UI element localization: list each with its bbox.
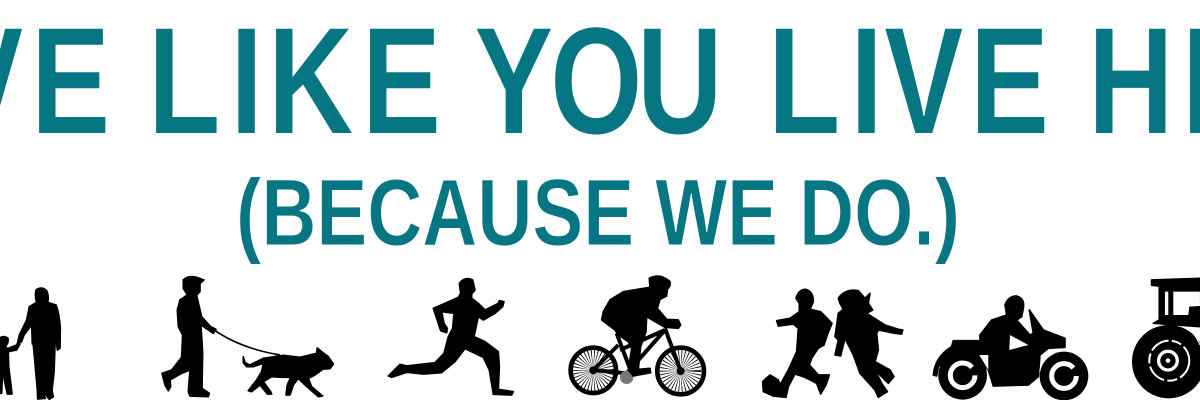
icon: person walking dog xyxy=(162,277,333,397)
icon: children playing football xyxy=(762,289,903,397)
subtitle: (BECAUSE WE DO.) xyxy=(236,160,960,266)
icon: motorcyclist xyxy=(933,296,1093,400)
icon: tractor xyxy=(1132,278,1200,398)
icon: cyclist xyxy=(571,276,704,394)
icon: runner xyxy=(388,279,513,395)
icon: adult and child walking xyxy=(0,288,60,399)
